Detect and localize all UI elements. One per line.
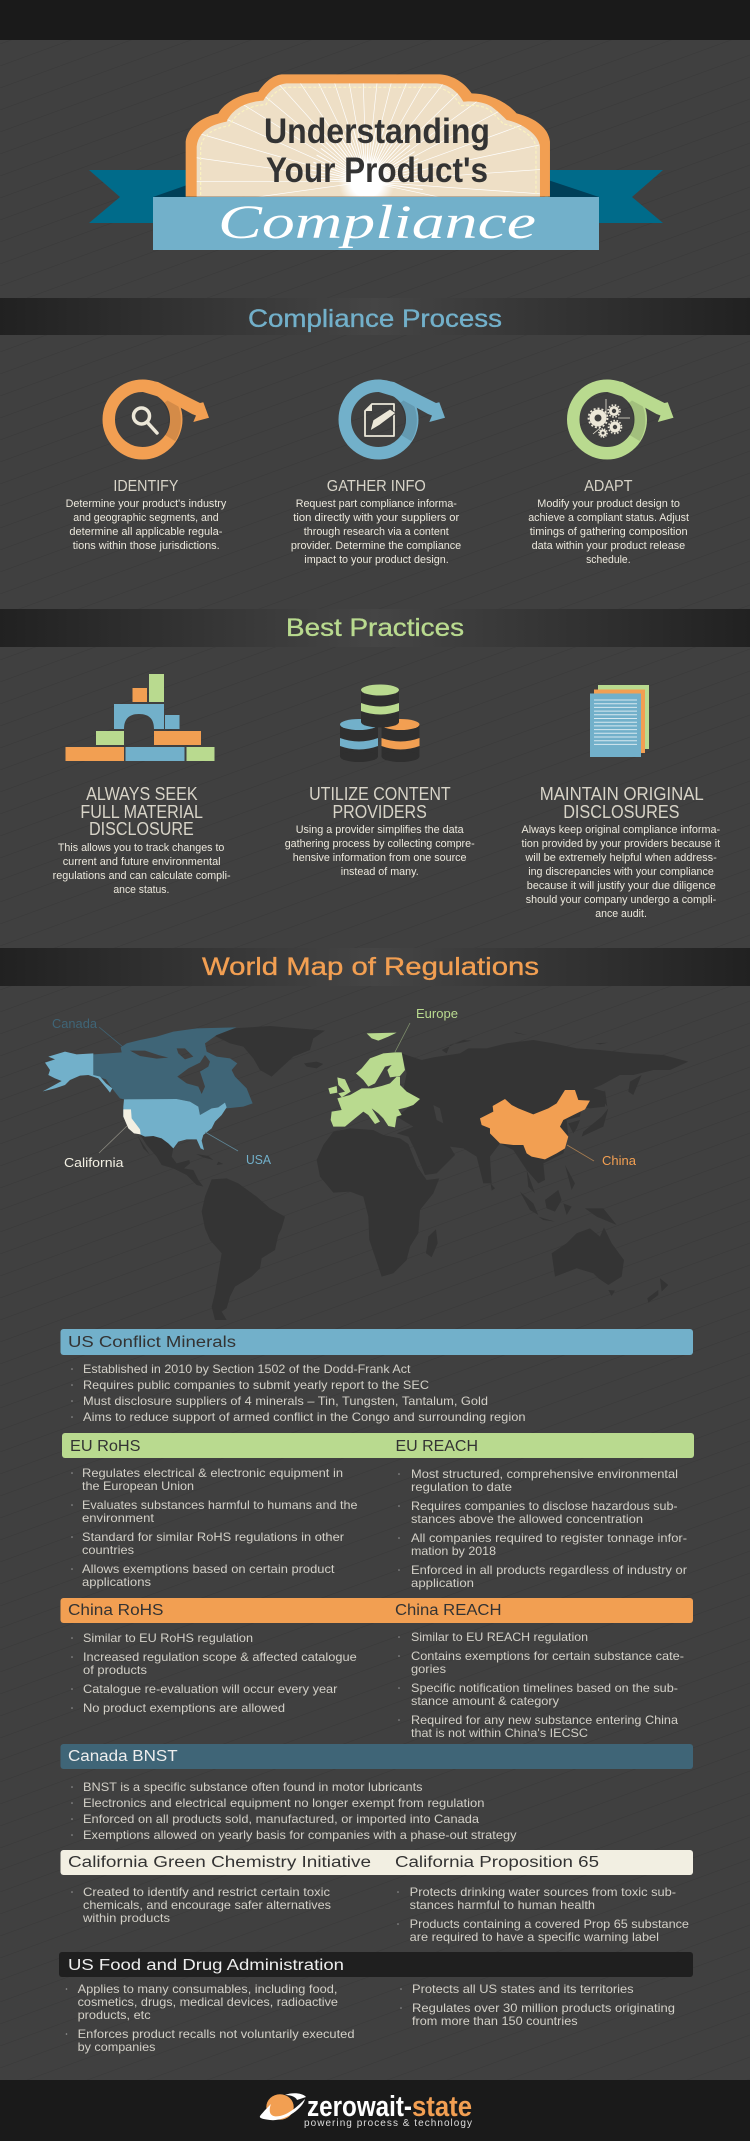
panel: EU RoHS and EU REACH: Requires companies to disclose hazardous sub- xyxy=(411,1499,678,1513)
panel: US Conflict Minerals: Must disclosure suppliers of 4 minerals – Tin, Tungsten, Tantalum, Gold xyxy=(83,1394,488,1408)
label: Canada: Canada xyxy=(52,1016,98,1031)
panel: Canada BNST: Electronics and electrical equipment no longer exempt from regulation xyxy=(83,1796,484,1810)
heading: DISCLOSURES xyxy=(563,802,680,822)
title line 1: Understanding xyxy=(264,112,490,151)
panel: EU RoHS and EU REACH: EU RoHS xyxy=(70,1438,140,1455)
description: schedule. xyxy=(586,554,631,566)
practice: content providers xyxy=(285,684,475,878)
description xyxy=(291,498,461,566)
icon: blue arrow ring with document xyxy=(345,380,445,453)
section band: best practices xyxy=(0,609,750,647)
description: will be extremely helpful when address- xyxy=(524,852,717,864)
panel: Canada BNST: Enforced on all products sold, manufactured, or imported into Canada xyxy=(83,1812,479,1826)
panel: California regulations: California Green Chemistry Initiative xyxy=(68,1854,371,1871)
footer xyxy=(0,2080,750,2141)
description: should your company undergo a compli- xyxy=(526,894,717,906)
panel: China RoHS and China REACH: of products xyxy=(83,1663,147,1677)
section band: compliance process xyxy=(0,298,750,335)
label: California: California xyxy=(64,1155,124,1170)
panel: EU RoHS and EU REACH: All companies required to register tonnage infor- xyxy=(411,1531,687,1545)
panel: US Conflict Minerals: Aims to reduce support of armed conflict in the Congo and surrounding region xyxy=(83,1410,526,1424)
panel: EU RoHS and EU REACH: Standard for similar RoHS regulations in other xyxy=(82,1530,344,1544)
panel: EU RoHS and EU REACH: Most structured, comprehensive environmental xyxy=(411,1467,678,1481)
section band: world map xyxy=(0,948,750,986)
description: tion directly with your suppliers or xyxy=(293,512,460,524)
callout lines xyxy=(99,1023,594,1161)
ribbon tails xyxy=(89,170,663,223)
heading: DISCLOSURE xyxy=(89,819,194,839)
heading xyxy=(80,784,203,839)
description: tion provided by your providers because it xyxy=(522,838,720,850)
description: gathering process by collecting compre- xyxy=(285,838,475,850)
panel: China RoHS and China REACH: stance amount & category xyxy=(411,1694,559,1708)
heading: FULL MATERIAL xyxy=(80,802,203,822)
step: adapt xyxy=(528,380,689,566)
panel: California regulations xyxy=(60,1850,693,1944)
label: USA: USA xyxy=(246,1152,271,1167)
panel: California regulations: Protects drinking water sources from toxic sub- xyxy=(410,1885,676,1899)
step: gather info xyxy=(291,380,461,566)
heading: ALWAYS SEEK xyxy=(86,784,198,804)
panel: US Food and Drug Administration xyxy=(59,1952,693,2054)
icon: building blocks xyxy=(66,674,214,761)
panel: US Conflict Minerals: Established in 2010 by Section 1502 of the Dodd-Frank Act xyxy=(83,1362,411,1376)
heading xyxy=(309,784,451,822)
panel: California regulations: within products xyxy=(82,1911,170,1925)
panel: US Food and Drug Administration: Enforces product recalls not voluntarily executed xyxy=(78,2027,354,2041)
description: through research via a content xyxy=(304,526,449,538)
description: ance status. xyxy=(113,884,169,896)
icon: orange arrow ring with magnifier xyxy=(109,380,209,453)
label: Europe: Europe xyxy=(416,1006,458,1021)
panel: EU RoHS and EU REACH: environment xyxy=(82,1511,155,1525)
icon: database stacks xyxy=(340,684,420,762)
map: eurasia, africa, oceania xyxy=(317,1032,688,1303)
heading: UTILIZE CONTENT xyxy=(309,784,451,804)
description: data within your product release xyxy=(532,540,685,552)
description: instead of many. xyxy=(341,866,419,878)
panel: EU RoHS and EU REACH: Evaluates substances harmful to humans and the xyxy=(82,1498,358,1512)
description xyxy=(522,824,720,920)
panel: US Conflict Minerals xyxy=(60,1329,693,1424)
panel: US Food and Drug Administration: from more than 150 countries xyxy=(412,2014,578,2028)
panel: China RoHS and China REACH: Similar to EU REACH regulation xyxy=(411,1630,588,1644)
panel: Canada BNST xyxy=(60,1744,693,1842)
description: timings of gathering composition xyxy=(530,526,688,538)
panel: California regulations: Created to identify and restrict certain toxic xyxy=(83,1885,330,1899)
description xyxy=(528,498,689,566)
description xyxy=(66,498,227,552)
heading: GATHER INFO xyxy=(327,478,426,495)
panel: China RoHS and China REACH: gories xyxy=(411,1662,446,1676)
description: This allows you to track changes to xyxy=(58,842,224,854)
panel: EU RoHS and EU REACH: application xyxy=(411,1576,474,1590)
panel: EU RoHS and EU REACH: Allows exemptions based on certain product xyxy=(82,1562,335,1576)
heading xyxy=(540,784,704,822)
panel: US Conflict Minerals: US Conflict Minerals xyxy=(68,1334,236,1351)
description: Request part compliance informa- xyxy=(296,498,457,510)
description: Determine your product's industry xyxy=(66,498,227,510)
logo wordmark: state xyxy=(412,2091,472,2123)
description: tions within those jurisdictions. xyxy=(73,540,220,552)
world map xyxy=(43,1006,688,1320)
description xyxy=(53,842,231,896)
practice: original disclosures xyxy=(522,685,720,920)
panel: China RoHS and China REACH: No product exemptions are allowed xyxy=(83,1701,285,1715)
description: Always keep original compliance informa- xyxy=(522,824,720,836)
section band: best practices: Best Practices xyxy=(286,614,464,642)
panel: Canada BNST: Exemptions allowed on yearly basis for companies with a phase-out strategy xyxy=(83,1828,516,1842)
panel: EU RoHS and EU REACH: Enforced in all products regardless of industry or xyxy=(411,1563,687,1577)
map: Canada xyxy=(93,1027,253,1115)
script title: Compliance xyxy=(218,196,536,249)
panel: China RoHS and China REACH: that is not within China's IECSC xyxy=(411,1726,588,1740)
panel: California regulations: chemicals, and encourage safer alternatives xyxy=(83,1898,331,1912)
panel: EU RoHS and EU REACH: regulation to date xyxy=(411,1480,512,1494)
panel: EU RoHS and EU REACH: the European Union xyxy=(82,1479,194,1493)
panel: California regulations: stances harmful to human health xyxy=(410,1898,595,1912)
description: Using a provider simplifies the data xyxy=(296,824,465,836)
map: USA xyxy=(43,1052,227,1150)
description xyxy=(285,824,475,878)
description: ance audit. xyxy=(595,908,647,920)
panel: China RoHS and China REACH: Specific notification timelines based on the sub- xyxy=(411,1681,678,1695)
panel: US Food and Drug Administration: Protects all US states and its territories xyxy=(412,1982,634,1996)
logo wordmark: zerowait- xyxy=(307,2091,412,2123)
panel: EU RoHS and EU REACH: mation by 2018 xyxy=(411,1544,496,1558)
panel: China RoHS and China REACH: Required for any new substance entering China xyxy=(411,1713,678,1727)
panel: China RoHS and China REACH: China REACH xyxy=(395,1602,502,1619)
panel: EU RoHS and EU REACH: stances above the allowed concentration xyxy=(411,1512,643,1526)
map: California xyxy=(123,1109,141,1134)
description: determine all applicable regula- xyxy=(69,526,223,538)
panel: US Food and Drug Administration: US Food and Drug Administration xyxy=(68,1957,344,1974)
heading: IDENTIFY xyxy=(113,478,179,495)
panel: California regulations: California Proposition 65 xyxy=(395,1854,599,1871)
icon: planet logo xyxy=(260,2093,306,2120)
panel: Canada BNST: BNST is a specific substance often found in motor lubricants xyxy=(83,1780,422,1794)
panel: China RoHS and China REACH: Increased regulation scope & affected catalogue xyxy=(83,1650,357,1664)
description: Modify your product design to xyxy=(537,498,680,510)
heading: PROVIDERS xyxy=(332,802,427,822)
panel: China RoHS and China REACH: Similar to EU RoHS regulation xyxy=(83,1631,253,1645)
description: provider. Determine the compliance xyxy=(291,540,461,552)
description: current and future environmental xyxy=(63,856,221,868)
panel: US Food and Drug Administration: cosmetics, drugs, medical devices, radioactive xyxy=(78,1995,338,2009)
panel: EU RoHS and EU REACH: EU REACH xyxy=(396,1438,478,1455)
panel: US Food and Drug Administration: Applies to many consumables, including food, xyxy=(78,1982,337,1996)
panel: California regulations: are required to have a specific warning label xyxy=(410,1930,659,1944)
scalloped badge xyxy=(186,74,550,197)
title line 2: Your Product's xyxy=(266,151,488,190)
map: Europe xyxy=(328,1033,420,1127)
description: and geographic segments, and xyxy=(73,512,219,524)
map: americas xyxy=(43,1026,325,1320)
section band: compliance process: Compliance Process xyxy=(248,305,502,333)
description: impact to your product design. xyxy=(304,554,449,566)
ribbon xyxy=(153,197,599,250)
title badge xyxy=(89,74,663,250)
panel: EU RoHS and EU REACH: applications xyxy=(82,1575,151,1589)
practice: full material disclosure xyxy=(53,674,231,896)
heading: ADAPT xyxy=(584,478,633,495)
section band: world map: World Map of Regulations xyxy=(202,953,539,981)
icon: document stack xyxy=(590,685,649,757)
panel: Canada BNST: Canada BNST xyxy=(68,1748,178,1765)
panel: US Conflict Minerals: Requires public companies to submit yearly report to the SEC xyxy=(83,1378,429,1392)
description: hensive information from one source xyxy=(293,852,466,864)
panel: China RoHS and China REACH: China RoHS xyxy=(68,1602,164,1619)
tagline: powering process & technology xyxy=(304,2118,472,2129)
step: identify xyxy=(66,380,227,552)
panel: EU RoHS and EU REACH xyxy=(62,1433,694,1590)
panel: US Food and Drug Administration: products, etc xyxy=(78,2008,151,2022)
map: China xyxy=(480,1090,590,1159)
description: achieve a compliant status. Adjust xyxy=(528,512,689,524)
panel: EU RoHS and EU REACH: countries xyxy=(82,1543,134,1557)
panel: EU RoHS and EU REACH: Regulates electrical & electronic equipment in xyxy=(82,1466,343,1480)
label: China: China xyxy=(602,1153,637,1168)
panel: California regulations: Products containing a covered Prop 65 substance xyxy=(410,1917,689,1931)
panel: China RoHS and China REACH: Catalogue re-evaluation will occur every year xyxy=(83,1682,337,1696)
description: ing discrepancies with your compliance xyxy=(528,866,714,878)
description: regulations and can calculate compli- xyxy=(53,870,231,882)
heading: MAINTAIN ORIGINAL xyxy=(540,784,704,804)
panel: China RoHS and China REACH: Contains exemptions for certain substance cate- xyxy=(411,1649,684,1663)
panel: US Food and Drug Administration: by companies xyxy=(78,2040,155,2054)
panel: US Food and Drug Administration: Regulates over 30 million products originating xyxy=(412,2001,675,2015)
panel: China RoHS and China REACH xyxy=(60,1598,693,1740)
icon: green arrow ring with gears xyxy=(573,380,674,453)
description: because it will justify your due diligence xyxy=(527,880,716,892)
